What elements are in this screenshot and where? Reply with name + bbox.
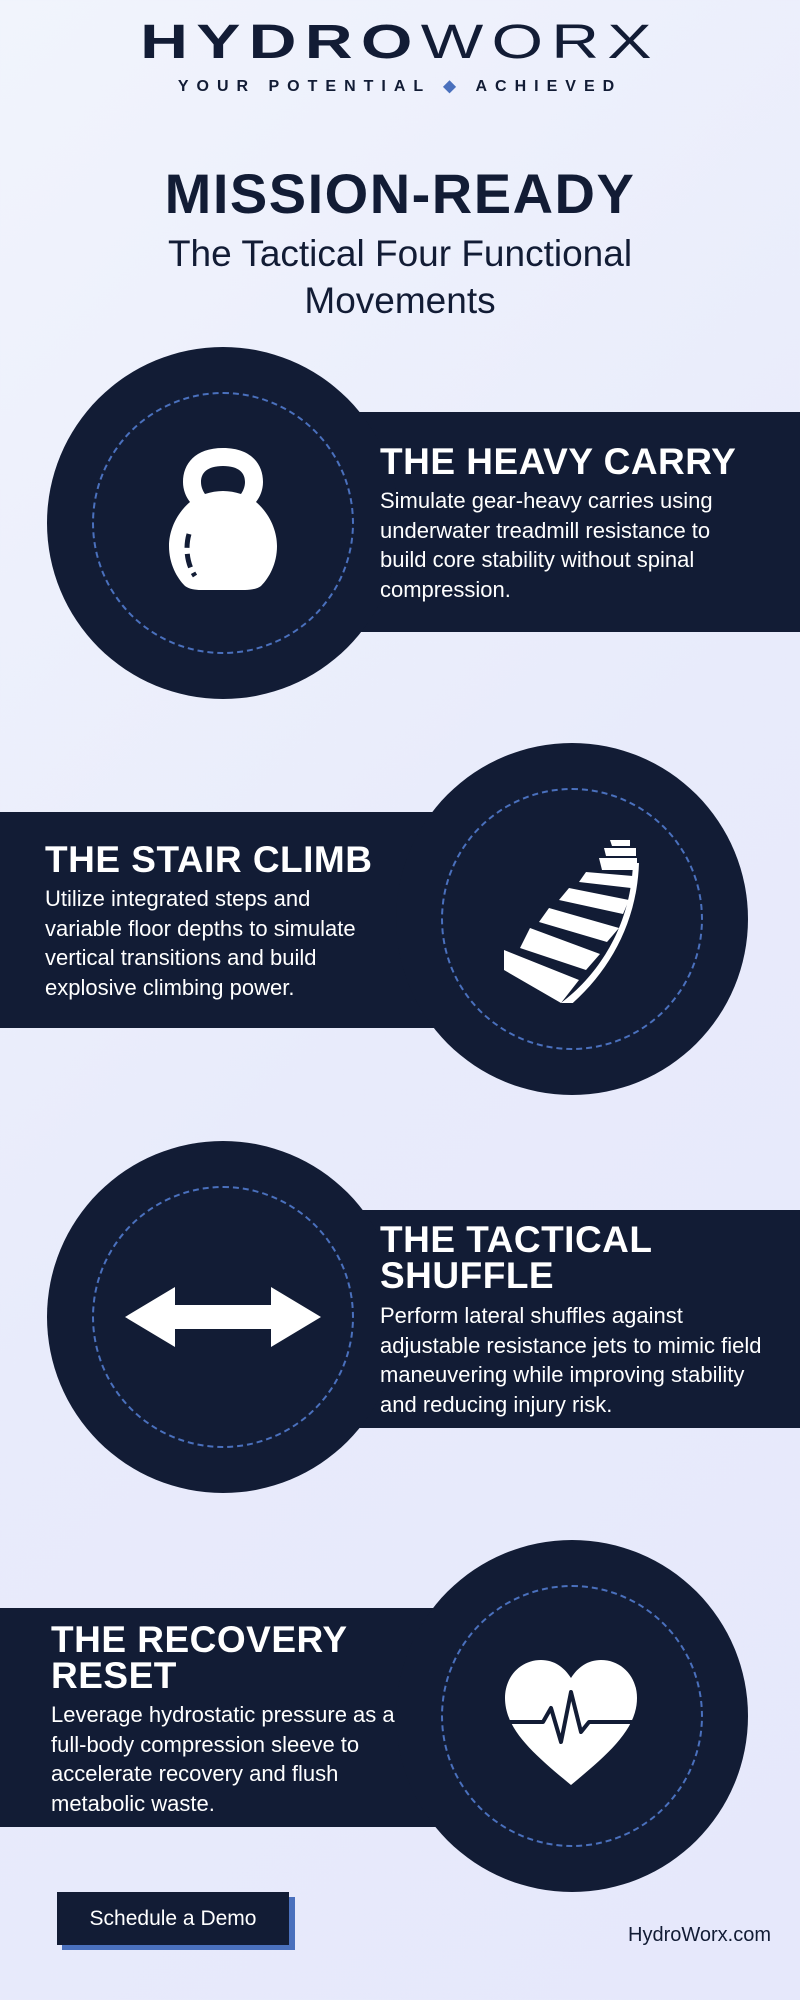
text: Leverage hydrostatic pressure as a full-body compression sleeve to accelerate recovery and flush metabolic waste. (51, 1702, 395, 1816)
subtitle: The Tactical Four Functional Movements (168, 233, 632, 321)
panel: recovery reset (0, 1540, 748, 1892)
icon: double arrow (125, 1287, 321, 1347)
title: MISSION-READY (165, 162, 635, 225)
logo: YOUR POTENTIAL ◆ ACHIEVED (178, 78, 622, 95)
icon: stairs (504, 840, 639, 1003)
heading (380, 1219, 652, 1296)
button: schedule a demo (57, 1892, 295, 1950)
panel: stair climb (0, 743, 748, 1095)
heading: THE RECOVERY (51, 1619, 348, 1660)
icon: heart with pulse (505, 1660, 637, 1785)
heading: SHUFFLE (380, 1255, 554, 1296)
heading: THE HEAVY CARRY (380, 441, 736, 482)
panel: tactical shuffle (47, 1141, 800, 1493)
logo (140, 16, 660, 95)
heading: THE STAIR CLIMB (45, 839, 372, 880)
heading: RESET (51, 1655, 177, 1696)
text: Utilize integrated steps and variable floor depths to simulate vertical transitions and build explosive climbing power. (45, 886, 356, 1000)
logo: HYDROWORX (140, 16, 660, 69)
text: Simulate gear-heavy carries using underwater treadmill resistance to build core stability without spinal compression. (380, 488, 713, 602)
footer url: HydroWorx.com (628, 1924, 771, 1946)
heading: THE TACTICAL (380, 1219, 652, 1260)
button: schedule a demo: Schedule a Demo (90, 1907, 256, 1930)
panel: heavy carry (47, 347, 800, 699)
icon: kettlebell (169, 448, 277, 590)
text: Perform lateral shuffles against adjustable resistance jets to mimic field maneuvering while improving stability and reducing injury risk. (380, 1303, 762, 1416)
heading (51, 1619, 348, 1696)
